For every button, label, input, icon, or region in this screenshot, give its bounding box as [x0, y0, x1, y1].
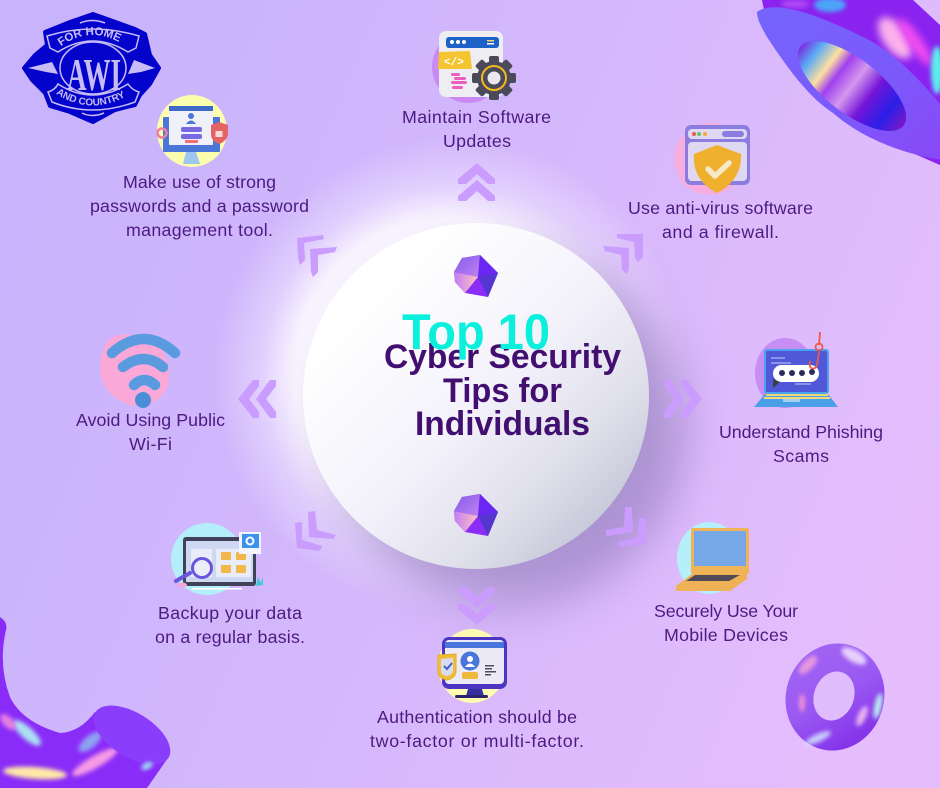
icon: gem top — [454, 255, 498, 297]
icon: wi-fi — [100, 335, 175, 408]
tip: authentication: Authentication should be — [377, 707, 577, 727]
tip: anti-virus: and a firewall. — [662, 222, 779, 242]
tip: backup: on a regular basis. — [155, 627, 305, 647]
decorative ring top right — [757, 0, 940, 165]
logo: AWI badge: FOR HOME — [57, 27, 122, 46]
arrow: down — [458, 587, 495, 625]
ring front face — [757, 7, 940, 160]
icon: password login monitor — [157, 95, 228, 167]
tip: strong passwords: Make use of strong — [123, 172, 276, 192]
decorative tube bottom left — [0, 617, 180, 788]
tip: phishing — [719, 422, 883, 466]
tip: public wi-fi — [76, 410, 225, 454]
arrow: bottom left — [295, 511, 336, 551]
ring hole — [784, 25, 920, 147]
tip: backup — [155, 603, 305, 647]
tip: public wi-fi: Wi-Fi — [129, 434, 172, 454]
icon: mobile device laptop — [676, 522, 749, 594]
tip: anti-virus: Use anti-virus software — [628, 198, 813, 218]
title: cyber security tips — [384, 338, 621, 443]
tip: anti-virus — [628, 198, 813, 242]
tip: public wi-fi: Avoid Using Public — [76, 410, 225, 430]
logo: AWI badge — [22, 12, 161, 124]
icon: software updates — [432, 31, 516, 103]
icon: authentication monitor — [438, 629, 507, 703]
tip: software updates: Maintain Software — [402, 107, 551, 127]
tip: software updates: Updates — [443, 131, 511, 151]
tip: authentication: two-factor or multi-factor. — [370, 731, 584, 751]
decorative donut bottom right — [772, 631, 898, 763]
tip: mobile devices: Mobile Devices — [664, 625, 788, 645]
tip: authentication — [370, 707, 584, 751]
center circle — [303, 223, 649, 569]
tip: phishing: Scams — [773, 446, 829, 466]
center glow and shadow — [214, 138, 690, 614]
icon: software updates: </> — [444, 57, 464, 69]
tip: phishing: Understand Phishing — [719, 422, 883, 442]
tip: mobile devices: Securely Use Your — [654, 601, 798, 621]
tip: strong passwords: passwords and a password — [90, 196, 309, 216]
tip: mobile devices — [654, 601, 798, 645]
tip: strong passwords: management tool. — [126, 220, 273, 240]
title: cyber security tips: Tips for — [443, 372, 562, 410]
arrow: bottom right — [605, 507, 646, 547]
arrow: top left — [297, 235, 337, 277]
arrow: top right — [603, 234, 643, 274]
arrow: right — [664, 380, 702, 418]
icon: backup data — [171, 523, 263, 595]
title: cyber security tips: Cyber Security — [384, 338, 621, 376]
tip: backup: Backup your data — [158, 603, 302, 623]
title: top 10: Top 10 — [402, 304, 550, 360]
logo: AWI badge: AND COUNTRY — [56, 89, 124, 106]
icon: antivirus shield — [674, 123, 750, 195]
icon: gem bottom — [454, 494, 498, 536]
icon: phishing laptop — [754, 332, 838, 408]
arrow: left — [238, 380, 276, 418]
tip: software updates — [402, 107, 551, 151]
tip: strong passwords — [90, 172, 309, 240]
arrow: up — [458, 163, 495, 201]
logo: AWI badge: AWI — [67, 49, 121, 100]
title: cyber security tips: Individuals — [415, 405, 590, 443]
